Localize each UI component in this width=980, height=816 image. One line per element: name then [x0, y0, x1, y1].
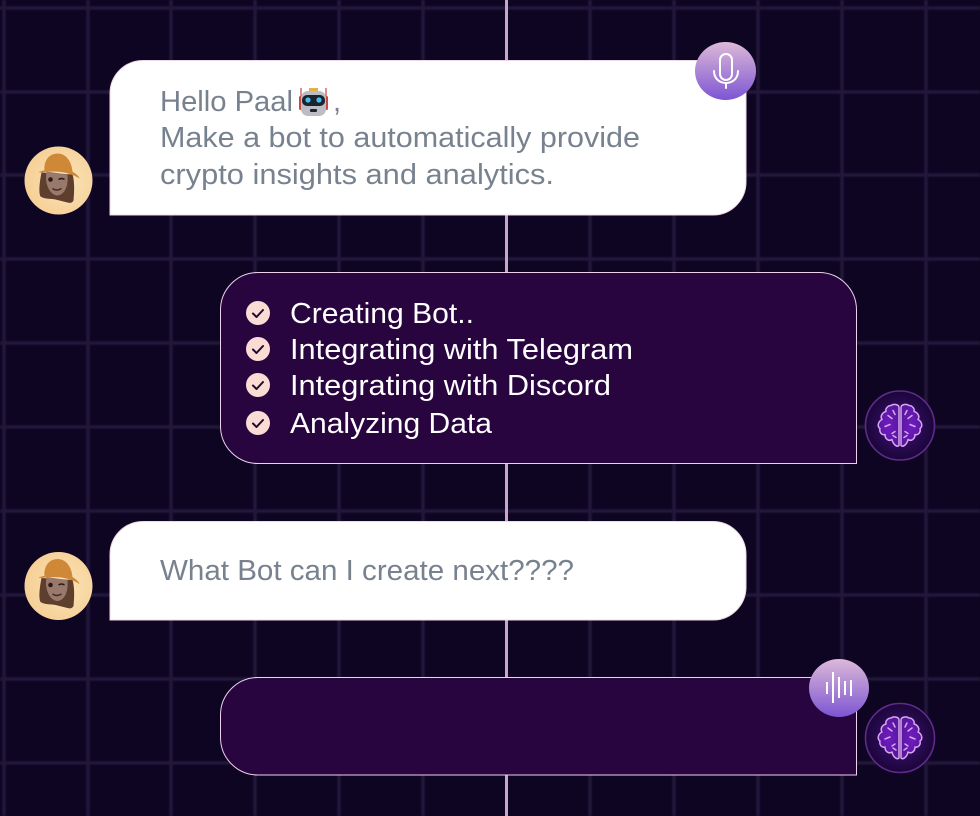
user message bubble 2 — [110, 522, 746, 620]
message text — [160, 86, 640, 191]
bot response bubble 1 — [220, 272, 856, 464]
icon: brain avatar 1 — [866, 391, 934, 460]
message text: Make a bot to automatically provide — [160, 122, 640, 154]
icon: brain avatar 2 — [866, 704, 934, 772]
avatar: user 2 — [24, 552, 92, 620]
vertical timeline line — [505, 0, 508, 816]
message text: Hello Paal — [160, 86, 293, 118]
checklist item: discord: Integrating with Discord — [290, 370, 611, 402]
message text: crypto insights and analytics. — [160, 159, 554, 191]
checklist item: creating bot: Creating Bot.. — [290, 298, 474, 330]
message text: What Bot can I create next???? — [160, 555, 574, 587]
bot response bubble 2 — [220, 678, 856, 775]
checklist item: analyzing data: Analyzing Data — [290, 408, 493, 440]
icon: microphone button — [695, 42, 756, 100]
icon: robot emoji — [299, 88, 328, 116]
message text: , — [333, 86, 341, 118]
checklist item: telegram: Integrating with Telegram — [290, 334, 633, 366]
avatar: user 1 — [24, 146, 92, 214]
icon: audio wave button — [809, 659, 869, 717]
user message bubble 1 — [110, 60, 746, 215]
